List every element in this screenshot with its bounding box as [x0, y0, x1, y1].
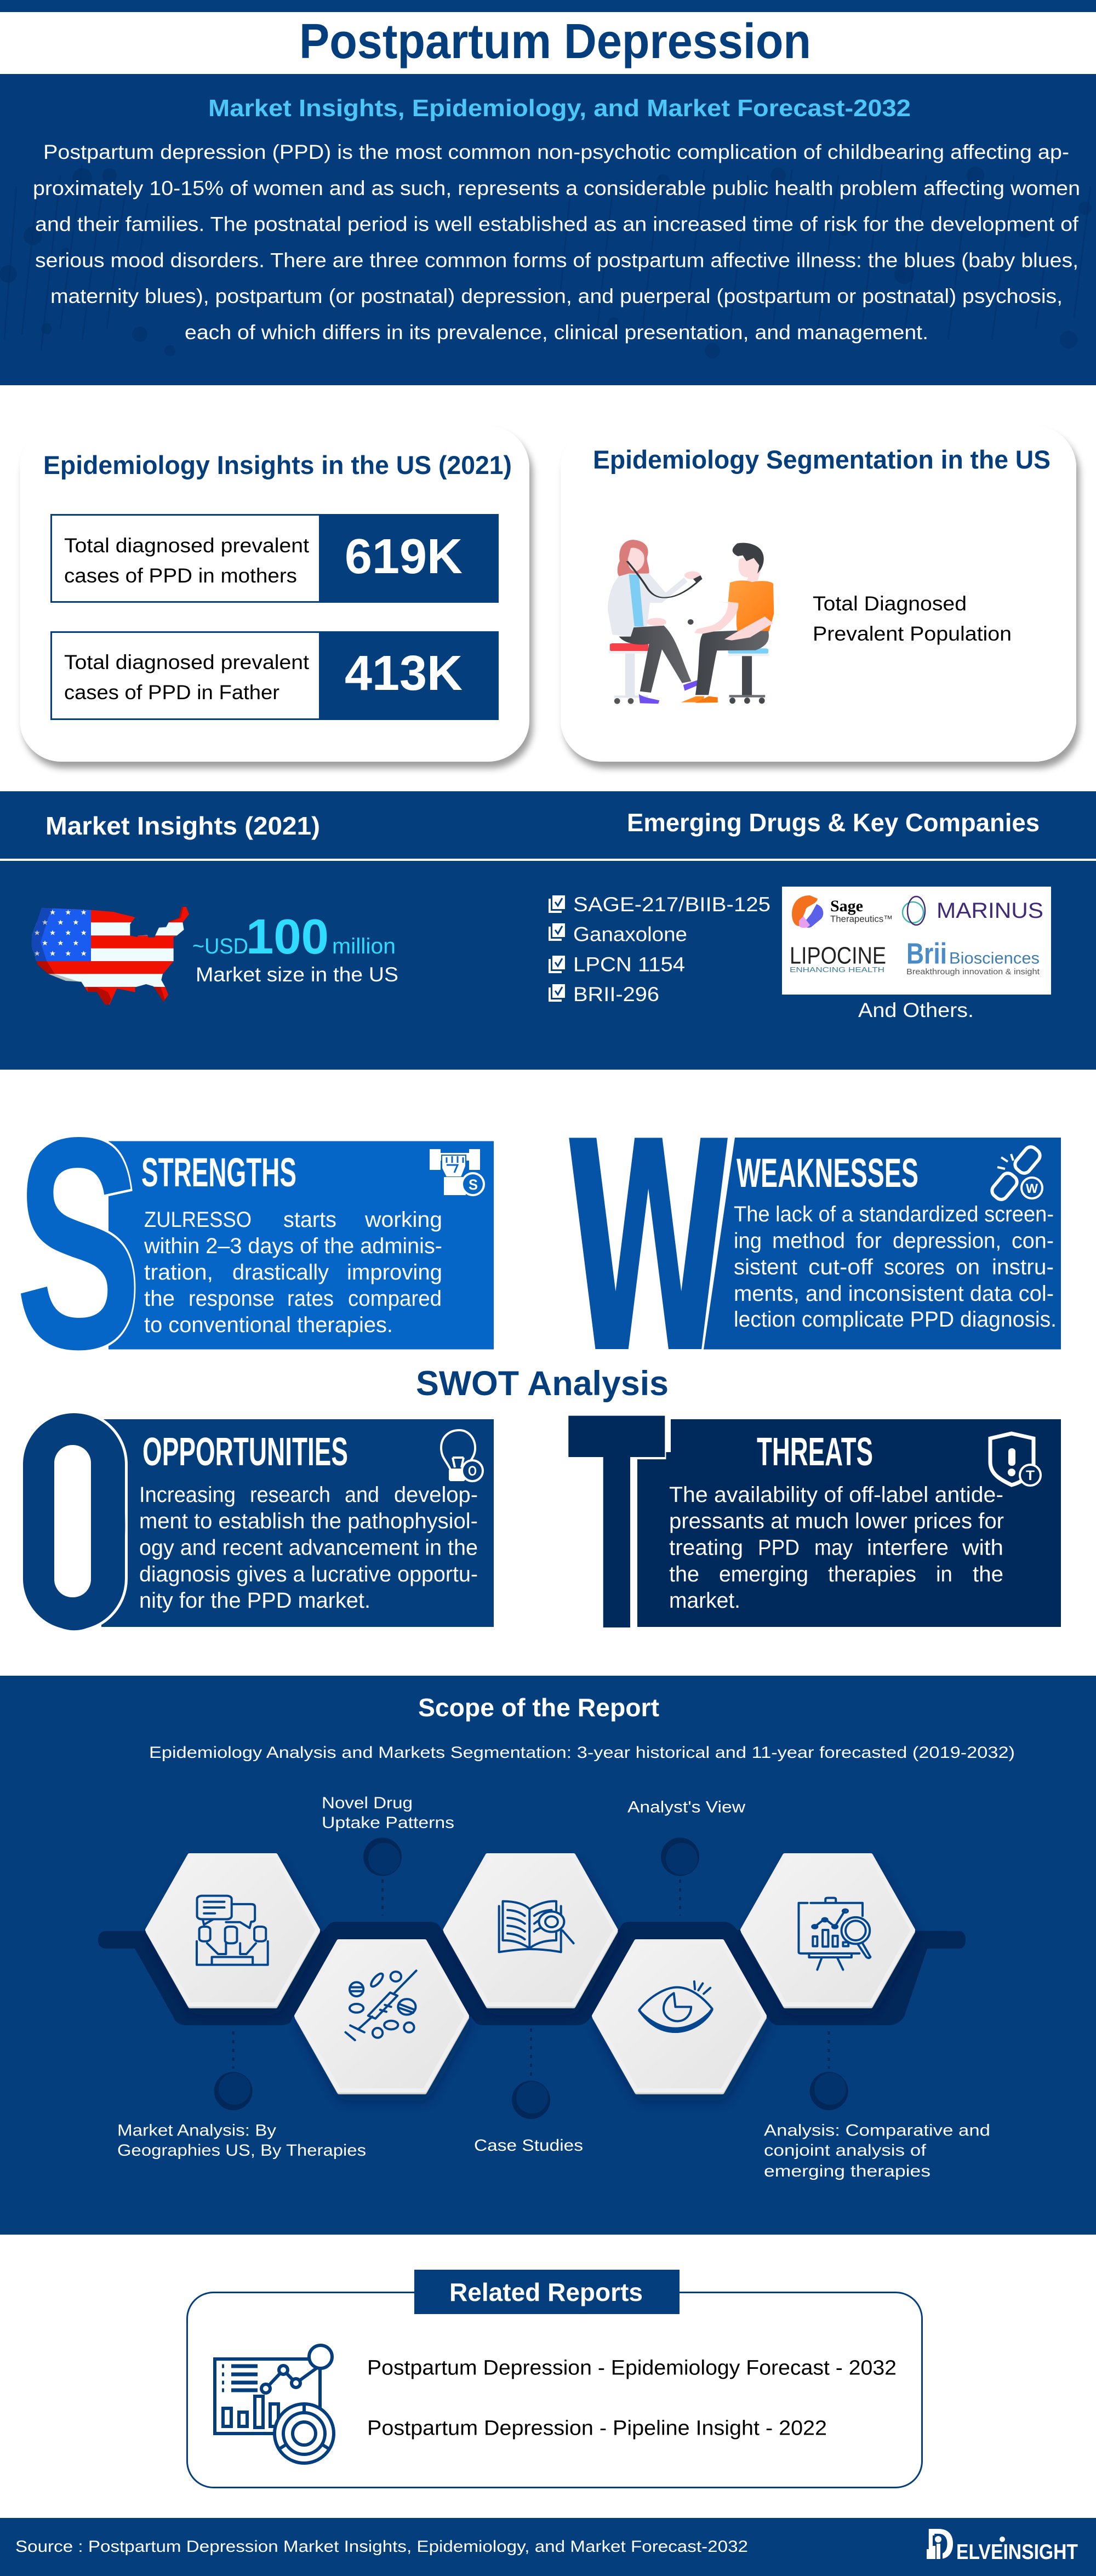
- icon: broken chain: W: [1026, 1181, 1038, 1196]
- dark snake band: [98, 1922, 966, 2025]
- body: weaknesses: cut-off: [808, 1255, 874, 1279]
- body: strengths: response: [189, 1287, 275, 1311]
- labels: scope items: Case Studies: [474, 2137, 583, 2155]
- heading: scope: Scope of the Report: [418, 1693, 659, 1722]
- panel: related reports: [187, 2270, 922, 2488]
- body: weaknesses: ing: [734, 1229, 762, 1253]
- logo: DelveInsight: D: [926, 2520, 955, 2568]
- body: weaknesses: [734, 1202, 1057, 1332]
- panel: opportunities: [16, 1367, 494, 1693]
- hexagon 2 with drug uptake icon: [296, 1941, 467, 2092]
- labels: scope items: Novel Drug: [322, 1794, 413, 1812]
- body: threats: PPD: [758, 1535, 800, 1560]
- subtitle: Market Insights, Epidemiology, and Market Forecast-2032: [208, 95, 911, 122]
- icon: light bulb: O: [468, 1464, 477, 1479]
- heading: related reports: [414, 2270, 680, 2314]
- icon: US flag map: [27, 906, 192, 1007]
- heading: related reports: Related Reports: [449, 2278, 643, 2306]
- body: opportunities: and: [345, 1483, 379, 1507]
- body: threats: therapies: [828, 1562, 916, 1586]
- stat: mothers: cases of PPD in mothers: [64, 564, 297, 587]
- body: threats: The availability of off-label antide-: [669, 1483, 1003, 1507]
- heading: SWOT analysis: SWOT Analysis: [416, 1364, 669, 1403]
- heading: opportunities: OPPORTUNITIES: [142, 1430, 348, 1474]
- body: threats: in: [936, 1562, 952, 1586]
- body: strengths: rates: [287, 1287, 334, 1311]
- labels: scope items: [117, 1794, 990, 2180]
- body: weaknesses: method: [772, 1229, 845, 1253]
- body: threats: may: [814, 1535, 853, 1560]
- intro paragraph: [33, 141, 1080, 344]
- dashed connectors: [233, 1880, 829, 2078]
- logo: Sage: [792, 895, 893, 928]
- labels: scope items: Geographies US, By Therapies: [117, 2141, 366, 2160]
- heading: epidemiology segmentation: Epidemiology Segmentation in the US: [593, 445, 1051, 474]
- label: population: Prevalent Population: [813, 622, 1012, 645]
- market size label: Market size in the US: [196, 963, 398, 986]
- body: threats: [669, 1483, 1004, 1613]
- body: threats: market.: [669, 1589, 740, 1613]
- report list: [367, 2356, 897, 2440]
- logo: Lipocine: LIPOCINE: [790, 943, 886, 969]
- source: Source : Postpartum Depression Market Insights, Epidemiology, and Market Forecast-2032: [15, 2538, 748, 2556]
- body: opportunities: [139, 1483, 478, 1613]
- body: strengths: compared: [348, 1287, 442, 1311]
- icon: light bulb: [441, 1430, 483, 1481]
- intro paragraph: maternity blues), postpartum (or postnatal) depression, and puerperal (postpartum or postnatal) psychosis,: [50, 285, 1063, 307]
- labels: scope items: Analysis: Comparative and: [764, 2122, 990, 2139]
- body: weaknesses: for: [856, 1229, 882, 1253]
- icon: fist and dumbbell: [430, 1149, 484, 1195]
- body: weaknesses: instru-: [992, 1255, 1054, 1279]
- panel: epidemiology segmentation: [561, 426, 1076, 762]
- company logos: [782, 887, 1051, 995]
- drug list: BRII-296: [573, 983, 659, 1006]
- body: strengths: the: [144, 1287, 175, 1311]
- intro paragraph: proximately 10-15% of women and as such, represents a considerable public health problem affecting women: [33, 177, 1080, 199]
- footer: [0, 2518, 1096, 2576]
- label: population: Total Diagnosed: [813, 592, 967, 615]
- report list: Postpartum Depression - Epidemiology Forecast - 2032: [367, 2356, 897, 2379]
- hexagon 4 with analyst view icon: [594, 1941, 764, 2092]
- letter W: W: [564, 1080, 733, 1418]
- logo: Marinus: MARINUS: [937, 899, 1043, 923]
- logo: Sage: Therapeutics™: [830, 914, 893, 924]
- body: strengths: to conventional therapies.: [144, 1313, 393, 1337]
- report list: Postpartum Depression - Pipeline Insight - 2022: [367, 2417, 827, 2440]
- panel: threats: [568, 1358, 1061, 1697]
- body: threats: emerging: [719, 1562, 808, 1586]
- heading: emerging drugs: Emerging Drugs & Key Companies: [627, 808, 1040, 837]
- drug list: SAGE-217/BIIB-125: [573, 893, 770, 916]
- body: strengths: within 2–3 days of the adminis-: [144, 1234, 442, 1258]
- stat: fathers: Total diagnosed prevalent: [64, 651, 310, 673]
- body: strengths: working: [364, 1208, 442, 1232]
- panel: introduction: [0, 74, 1096, 385]
- market size value: ~USD: [192, 934, 248, 958]
- logo: Brii: Brii: [906, 937, 947, 970]
- logo: Brii: Biosciences: [949, 949, 1040, 968]
- body: opportunities: research: [250, 1483, 330, 1507]
- body: strengths: ZULRESSO: [144, 1208, 252, 1232]
- icon: fist and dumbbell: S: [469, 1176, 478, 1193]
- panel: weaknesses: [564, 1080, 1061, 1418]
- body: strengths: tration,: [144, 1260, 213, 1284]
- top bar: [0, 0, 1096, 12]
- body: opportunities: ment to establish the pathophysiol-: [139, 1509, 478, 1533]
- intro paragraph: Postpartum depression (PPD) is the most common non-psychotic complication of childbearing affecting ap-: [43, 141, 1069, 163]
- body: weaknesses: scores: [884, 1255, 945, 1279]
- heading: market insights: Market Insights (2021): [45, 812, 320, 840]
- scope subtitle: Epidemiology Analysis and Markets Segmentation: 3-year historical and 11-year forecasted (2019-2032): [149, 1744, 1015, 1762]
- body: threats: the: [973, 1562, 1003, 1586]
- logo: Sage: Sage: [830, 897, 863, 915]
- panel: market insights and drugs: [0, 791, 1096, 1070]
- logo: DelveInsight: ELVEINSIGHT: [956, 2540, 1078, 2564]
- icon: shield: [990, 1433, 1041, 1486]
- intro paragraph: each of which differs in its prevalence, clinical presentation, and management.: [185, 321, 928, 344]
- body: opportunities: nity for the PPD market.: [139, 1589, 370, 1613]
- body: weaknesses: sistent: [734, 1255, 797, 1279]
- labels: scope items: emerging therapies: [764, 2162, 931, 2180]
- icon: dashboard: [213, 2345, 334, 2463]
- connector dots: [214, 1838, 848, 2119]
- icon: broken chain: [989, 1144, 1043, 1202]
- body: opportunities: diagnosis gives a lucrative opportu-: [139, 1562, 478, 1586]
- body: weaknesses: ments, and inconsistent data col-: [734, 1282, 1054, 1306]
- body: strengths: improving: [347, 1260, 442, 1284]
- stat: mothers: Total diagnosed prevalent: [64, 534, 310, 557]
- labels: scope items: Market Analysis: By: [117, 2122, 276, 2139]
- stat: mothers: [52, 514, 498, 603]
- body: weaknesses: The lack of a standardized screen-: [734, 1202, 1054, 1226]
- title: Postpartum Depression: [299, 14, 811, 69]
- labels: scope items: conjoint analysis of: [764, 2141, 927, 2160]
- body: threats: with: [962, 1535, 1003, 1560]
- body: strengths: starts: [283, 1208, 336, 1232]
- panel: scope of the report: [0, 1676, 1096, 2235]
- logo: Lipocine: ENHANCING HEALTH: [790, 966, 884, 974]
- label: population: [813, 592, 1012, 645]
- panel: strengths: [15, 1075, 494, 1412]
- body: weaknesses: depression,: [893, 1229, 1001, 1253]
- hexagon 1 with market analysis icon: [147, 1855, 318, 2006]
- body: weaknesses: con-: [1012, 1229, 1054, 1253]
- stat: fathers: cases of PPD in Father: [64, 681, 279, 704]
- panel: epidemiology insights: [20, 426, 529, 762]
- logo: Marinus: [903, 896, 1043, 925]
- logo: DelveInsight: [926, 2520, 1078, 2568]
- icon: shield: T: [1026, 1468, 1035, 1483]
- labels: scope items: Uptake Patterns: [322, 1814, 454, 1832]
- drug list: Ganaxolone: [573, 923, 687, 946]
- heading: strengths: STRENGTHS: [141, 1150, 296, 1195]
- letter S: S: [15, 1075, 141, 1412]
- market size value: 100: [246, 910, 329, 964]
- logo: Brii: [906, 937, 1040, 976]
- illustration: doctor and patient: [608, 540, 774, 704]
- body: strengths: drastically: [232, 1260, 329, 1284]
- body: opportunities: develop-: [394, 1483, 478, 1507]
- body: weaknesses: on: [956, 1255, 980, 1279]
- market size value: million: [332, 934, 396, 958]
- body: threats: the: [669, 1562, 699, 1586]
- hexagon 3 with case studies icon: [445, 1855, 616, 2006]
- body: opportunities: ogy and recent advancement in the: [139, 1535, 478, 1560]
- letter O: O: [16, 1367, 132, 1693]
- intro paragraph: and their families. The postnatal period is well established as an increased time of risk for the development of: [35, 213, 1079, 236]
- drug list: [549, 893, 770, 1006]
- heading: weaknesses: WEAKNESSES: [737, 1150, 918, 1196]
- body: threats: interfere: [867, 1535, 949, 1560]
- body: opportunities: Increasing: [139, 1483, 236, 1507]
- body: threats: pressants at much lower prices for: [669, 1509, 1004, 1533]
- drug list: LPCN 1154: [573, 953, 685, 975]
- stat: mothers: 619K: [345, 529, 463, 584]
- stat: fathers: [52, 631, 498, 720]
- body: threats: treating: [669, 1535, 743, 1560]
- logo: Brii: Breakthrough innovation & insight: [906, 967, 1040, 976]
- heading: threats: THREATS: [757, 1430, 873, 1474]
- body: strengths: [144, 1208, 442, 1337]
- market size value: [192, 910, 396, 964]
- stat: fathers: 413K: [345, 646, 463, 701]
- hexagon 5 with comparative analysis icon: [743, 1855, 913, 2006]
- heading: epidemiology insights: Epidemiology Insights in the US (2021): [43, 450, 512, 479]
- intro paragraph: serious mood disorders. There are three common forms of postpartum affective illness: the blues (baby blues,: [35, 249, 1078, 272]
- letter T: T: [568, 1358, 666, 1697]
- and others: And Others.: [858, 999, 974, 1021]
- labels: scope items: Analyst's View: [627, 1798, 745, 1816]
- body: weaknesses: lection complicate PPD diagnosis.: [734, 1307, 1057, 1332]
